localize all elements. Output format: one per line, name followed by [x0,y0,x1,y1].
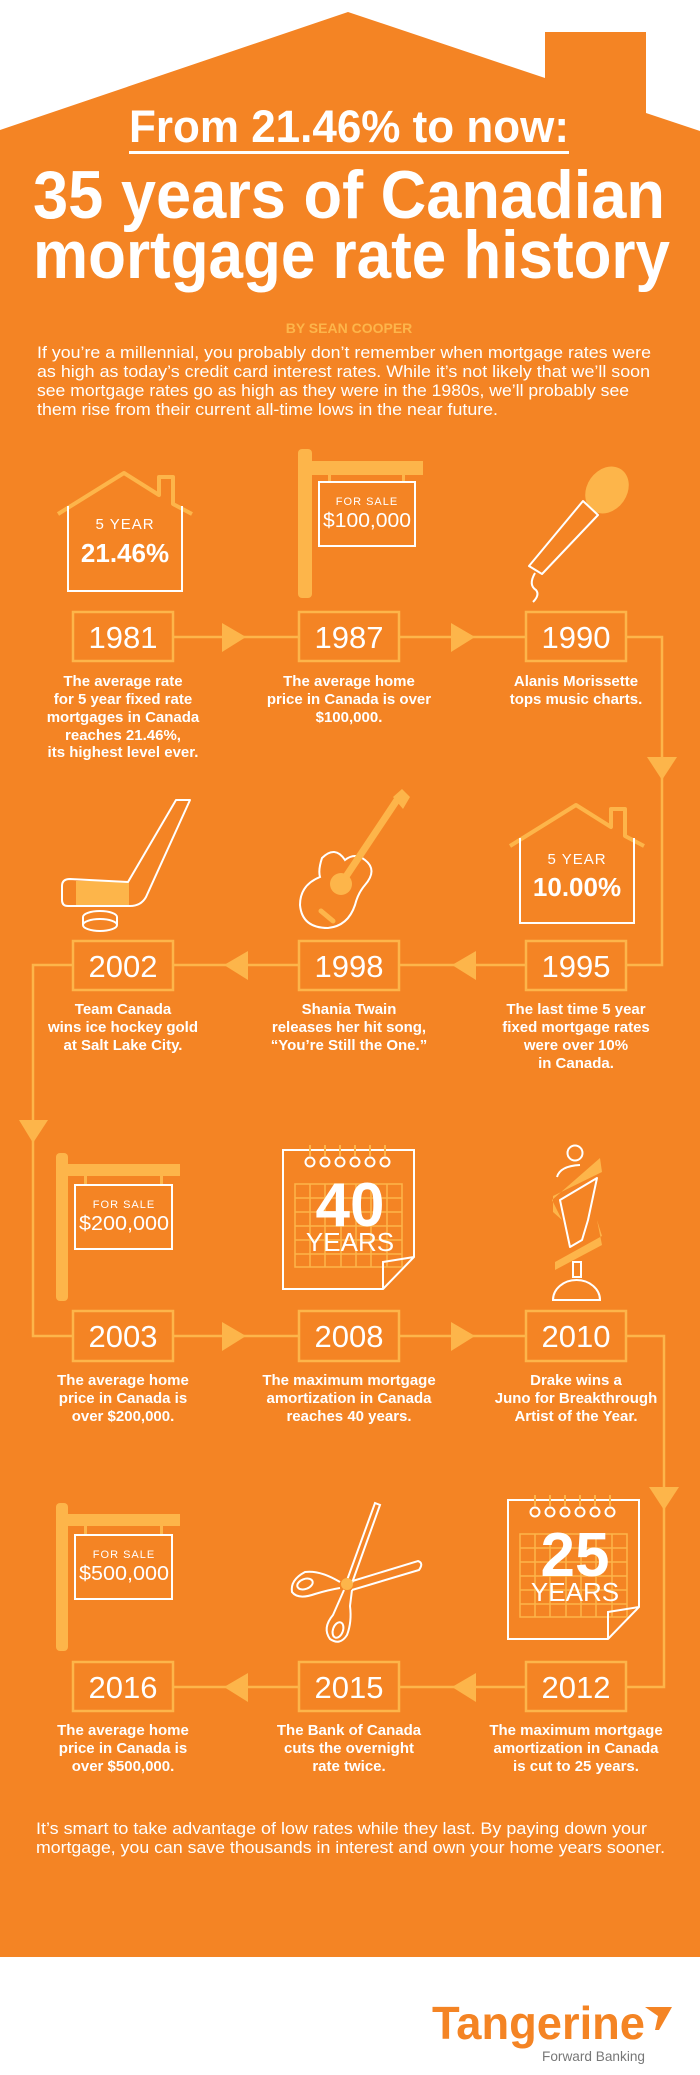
icon: scissors [292,1503,421,1642]
event 2002: at Salt Lake City. [64,1037,182,1054]
icon: hockey stick and puck [62,800,190,931]
event 2008: reaches 40 years. [286,1408,412,1425]
intro paragraph: If you’re a millennial, you probably don’t remember when mortgage rates were [37,343,651,362]
event 2010: Juno for Breakthrough [495,1390,657,1407]
event 1981: reaches 21.46%, [65,727,181,744]
event 2010: Artist of the Year. [514,1408,638,1425]
byline: BY SEAN COOPER [286,320,412,336]
event 2015: 2015 [315,1670,383,1705]
event 2010: 2010 [542,1319,610,1354]
event 1990: 1990 [542,620,610,655]
event 1987 [267,449,431,726]
logo: Tangerine Forward Banking [432,1997,672,2064]
timeline connector lines [33,637,664,1687]
event 1998: Shania Twain [302,1001,396,1018]
event 2015: The Bank of Canada [277,1722,422,1739]
icon: calendar 25 years [508,1495,639,1639]
event 1995: were over 10% [523,1037,628,1054]
icon: for sale sign $500,000: FOR SALE [93,1549,155,1561]
event 2012 [489,1495,663,1775]
event 1995: in Canada. [538,1055,614,1072]
icon: calendar 40 years: 40 [316,1171,384,1240]
event 1995: The last time 5 year [506,1001,646,1018]
event 2003: The average home [57,1372,189,1389]
event 1981: mortgages in Canada [47,709,200,726]
event 1987: $100,000. [316,709,382,726]
event 1998: 1998 [315,949,383,984]
title: 35 years of Canadian [33,157,665,233]
intro paragraph: them rise from their current all-time lows in the near future. [37,400,498,419]
event 2016 [56,1503,189,1775]
event 2016: The average home [57,1722,189,1739]
event 1987: 1987 [315,620,383,655]
event 1987: price in Canada is over [267,691,431,708]
logo: Tangerine Forward Banking: Forward Banking [542,2048,645,2064]
closing paragraph: mortgage, you can save thousands in interest and own your home years sooner. [36,1838,665,1857]
event 1981: its highest level ever. [48,744,198,761]
intro paragraph: see mortgage rates go as high as they were in the 1980s, we’ll probably see [37,381,629,400]
closing paragraph [36,1819,665,1857]
event 2008 [262,1145,436,1425]
icon: house 21.46%: 5 YEAR [95,516,155,533]
event 2012: amortization in Canada [493,1740,659,1757]
event 2003: over $200,000. [72,1408,174,1425]
title: From 21.46% to now: [129,101,569,152]
event 2002: wins ice hockey gold [47,1019,198,1036]
event 1981 [47,473,200,761]
event 1981: The average rate [63,673,183,690]
icon: calendar 25 years: 25 [541,1521,609,1590]
event 1990: tops music charts. [510,691,642,708]
event 1981: for 5 year fixed rate [54,691,192,708]
icon: for sale sign $200,000 [56,1153,180,1301]
event 1990 [510,458,642,708]
icon: calendar 25 years: YEARS [531,1577,619,1607]
logo: Tangerine Forward Banking: Tangerine [432,1997,645,2049]
icon: house 21.46% [58,473,192,591]
event 2008: The maximum mortgage [262,1372,436,1389]
event 2015: cuts the overnight [284,1740,414,1757]
icon: house 21.46%: 21.46% [81,538,169,568]
event 2012: 2012 [542,1670,610,1705]
event 1998: releases her hit song, [272,1019,426,1036]
intro paragraph [37,343,651,419]
event 1998 [271,789,427,1054]
event 2002 [47,800,198,1054]
icon: house 10.00% [510,805,644,923]
event 2016: 2016 [89,1670,157,1705]
event 1995 [502,805,650,1072]
icon: for sale sign $100,000: $100,000 [323,510,411,532]
event 2016: price in Canada is [59,1740,187,1757]
event 2008: 2008 [315,1319,383,1354]
arrows [19,623,679,1702]
icon: for sale sign $200,000: FOR SALE [93,1199,155,1211]
event 1981: 1981 [89,620,157,655]
icon: calendar 40 years: YEARS [306,1227,394,1257]
event 2003 [56,1153,189,1425]
icon: house 10.00%: 5 YEAR [547,851,607,868]
icon: guitar [300,789,410,928]
event 2012: The maximum mortgage [489,1722,663,1739]
icon: Juno trophy [552,1146,602,1300]
event 2003: 2003 [89,1319,157,1354]
icon: microphone [529,458,638,602]
event 2015 [277,1503,422,1775]
event 2010 [495,1146,657,1425]
icon: for sale sign $100,000 [298,449,423,598]
icon: calendar 40 years [283,1145,414,1289]
event 2016: over $500,000. [72,1758,174,1775]
event 1998: “You’re Still the One.” [271,1037,427,1054]
event 2002: 2002 [89,949,157,984]
event 2008: amortization in Canada [266,1390,432,1407]
event 2002: Team Canada [75,1001,172,1018]
intro paragraph: as high as today’s credit card interest rates. While it’s not likely that we’ll soon [37,362,650,381]
icon: for sale sign $500,000 [56,1503,180,1651]
event 1995: fixed mortgage rates [502,1019,650,1036]
icon: house 10.00%: 10.00% [533,872,621,902]
icon: for sale sign $200,000: $200,000 [79,1213,169,1235]
event 1990: Alanis Morissette [514,673,638,690]
closing paragraph: It’s smart to take advantage of low rates while they last. By paying down your [36,1819,647,1838]
icon: for sale sign $500,000: $500,000 [79,1563,169,1585]
title [33,101,670,293]
event 1995: 1995 [542,949,610,984]
event 2015: rate twice. [312,1758,386,1775]
event 2010: Drake wins a [530,1372,623,1389]
event 2012: is cut to 25 years. [513,1758,639,1775]
event 1987: The average home [283,673,415,690]
event 2003: price in Canada is [59,1390,187,1407]
icon: for sale sign $100,000: FOR SALE [336,496,398,508]
